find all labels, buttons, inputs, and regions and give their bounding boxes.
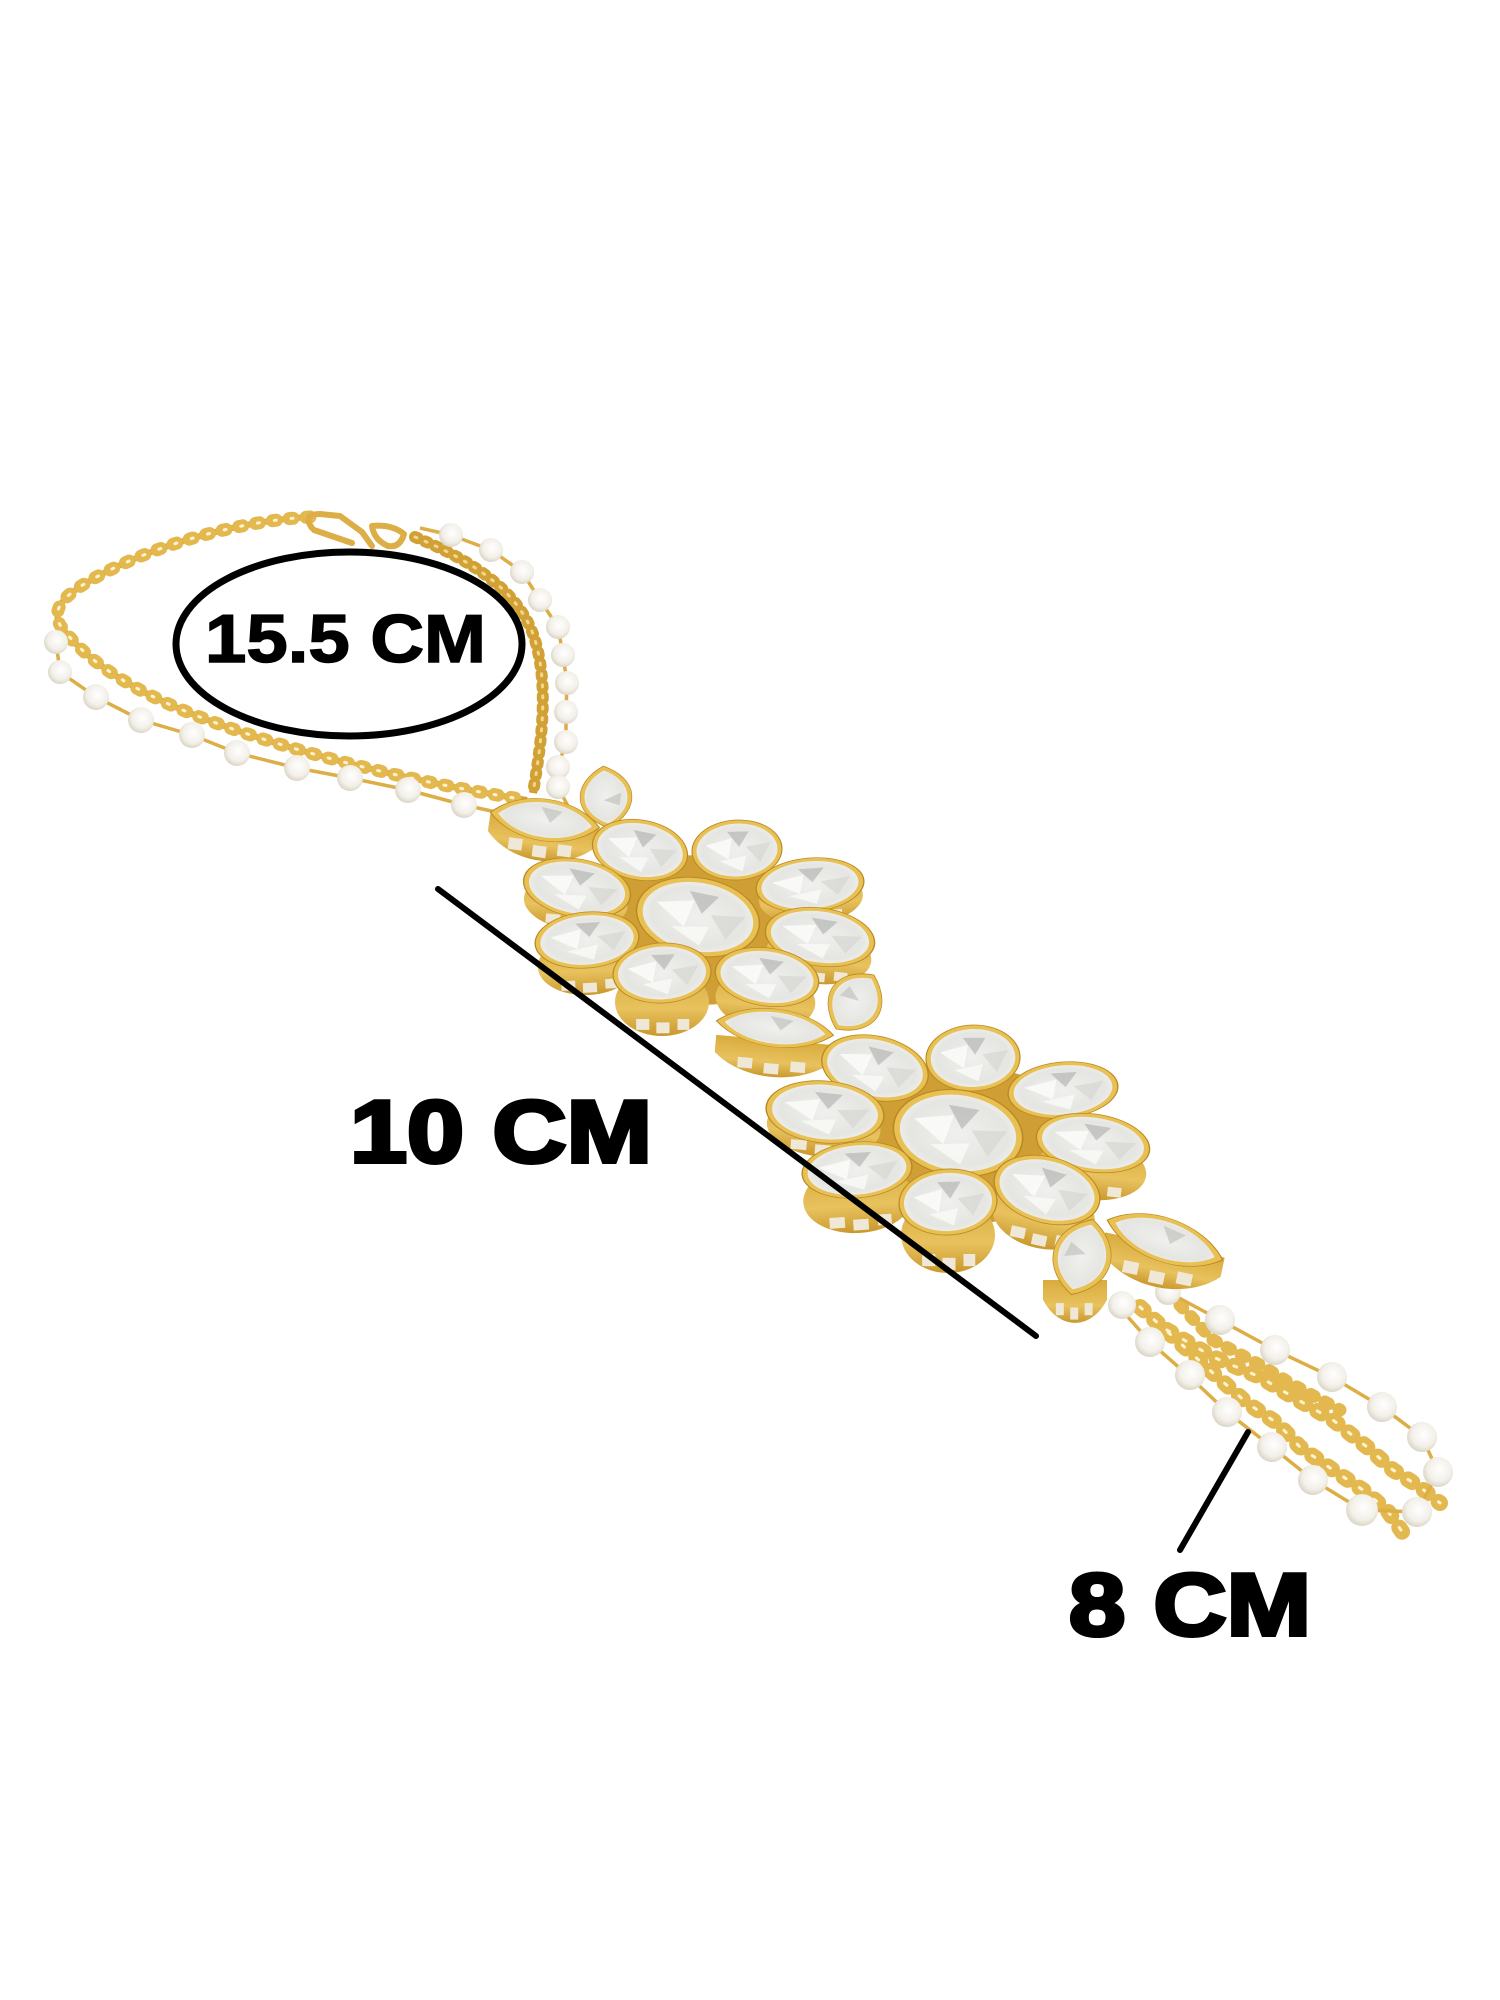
lower right chains xyxy=(1140,1305,1440,1533)
label: 8 CM: 8 CM xyxy=(1069,1555,1311,1654)
dimension callout: 15.5 CM oval xyxy=(176,552,522,736)
lower flower cluster stones xyxy=(764,1023,1230,1302)
left pearl strand xyxy=(44,523,579,818)
label: 10 CM: 10 CM xyxy=(350,1082,652,1181)
label: 15.5 CM: 15.5 CM xyxy=(205,601,486,677)
dimension line: 8 CM xyxy=(1180,1432,1248,1550)
oval outline xyxy=(176,552,522,736)
hook clasp xyxy=(308,514,404,546)
left chain loop xyxy=(57,517,543,800)
gold setting backing xyxy=(485,812,1225,1323)
dimension line: 10 CM xyxy=(438,889,1036,1336)
jewellery: hand harness xyxy=(44,514,1453,1533)
lower right pearl strands xyxy=(1108,1279,1453,1527)
upper flower cluster stones xyxy=(488,764,896,1054)
